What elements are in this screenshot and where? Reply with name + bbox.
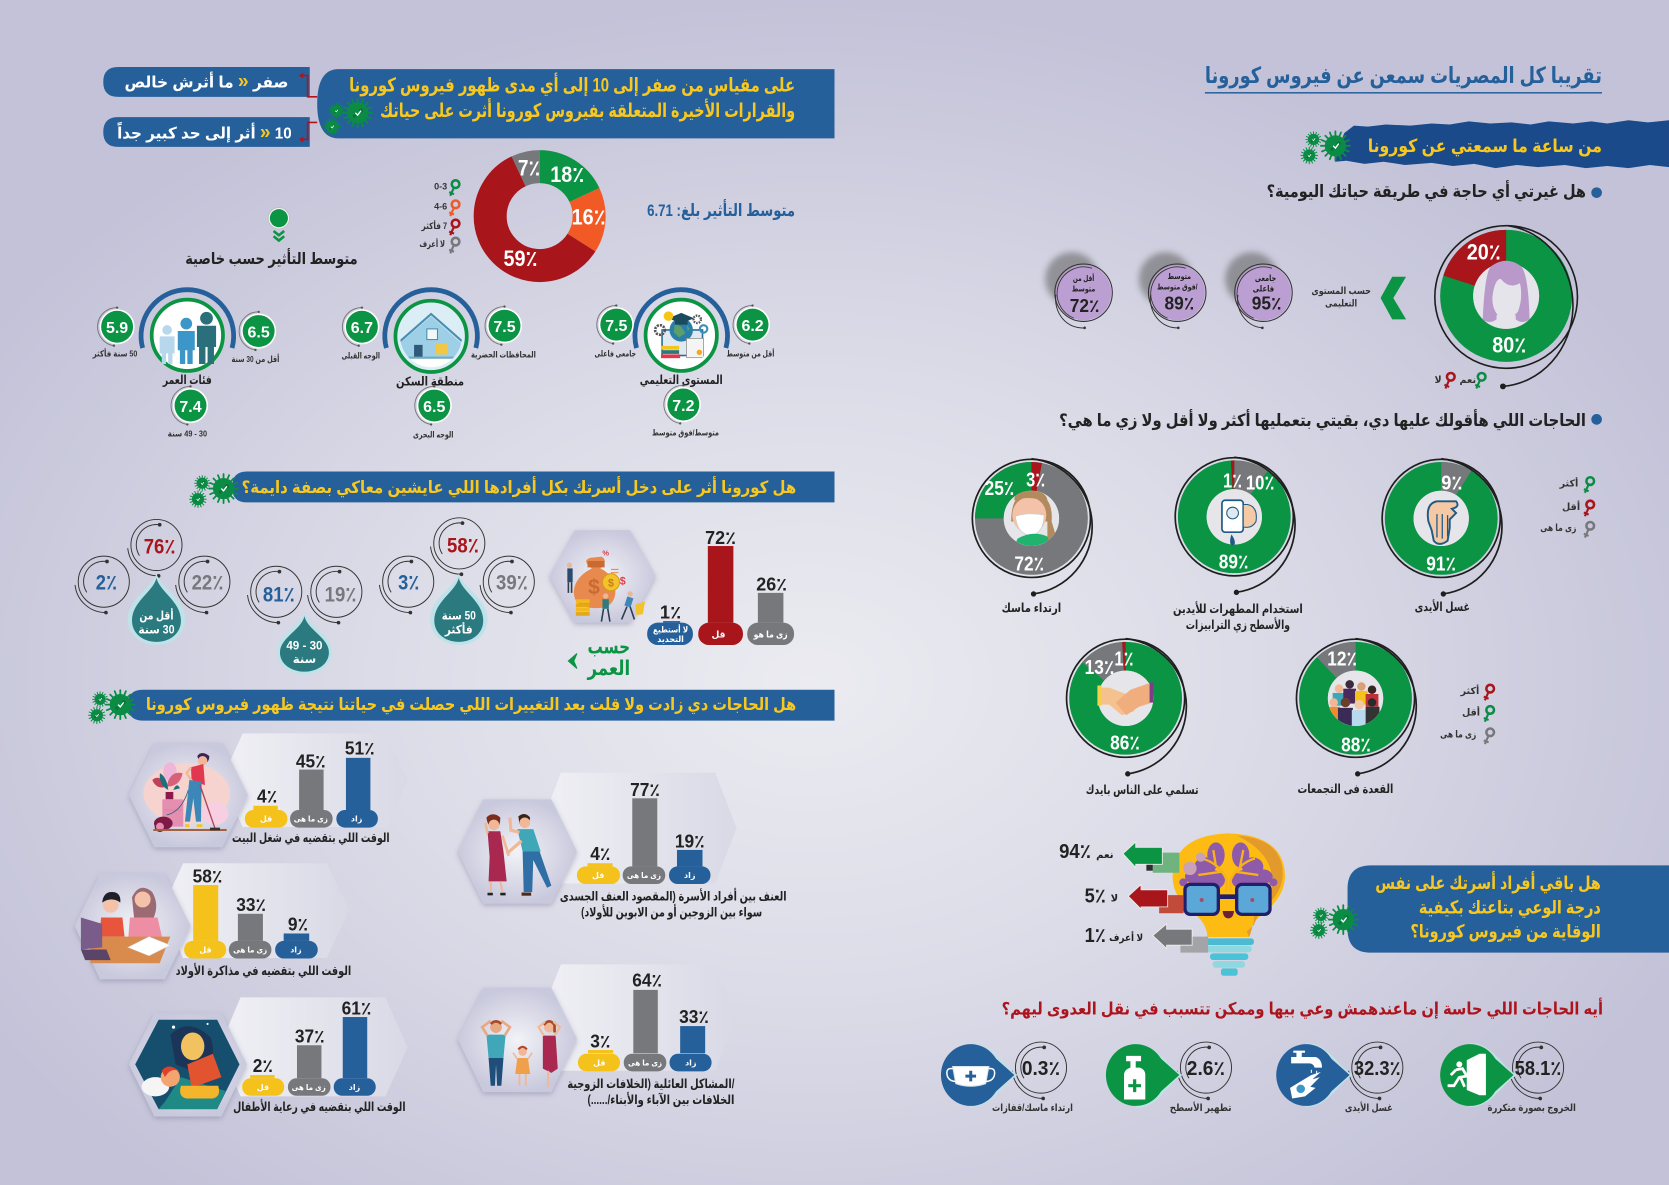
caption: سواء بين الزوجين أو من الابوين للأولاد): [581, 903, 762, 919]
value: over 50: 50 سنة فأكثر: [92, 348, 138, 360]
banner: family awareness: درجة الوعي بتاعتك بكيفية: [1419, 897, 1601, 918]
donut chart: changed daily life: [1435, 226, 1577, 389]
bars: زى ما هى: [628, 1058, 662, 1067]
bars: زى ما هى: [627, 871, 661, 880]
bar: decreased: [698, 528, 743, 645]
value: urban governorates: [471, 305, 536, 361]
value: urban governorates: 7.5: [493, 319, 516, 336]
arrow: don't know gray: [1153, 924, 1208, 953]
caption: /المشاكل العائلية (الخلافات الزوجية: [567, 1076, 735, 1091]
item: exit frequently: [1440, 1042, 1576, 1114]
icon: money bag hexagon: $: [620, 575, 626, 587]
bars: [577, 780, 710, 884]
circle: university: [1225, 252, 1292, 329]
stat: no 5: لا: [1111, 894, 1118, 905]
pill: zero: صفر « ما أثرش خالص: [125, 70, 288, 92]
donut: handshake: 1٪: [1114, 648, 1134, 670]
circle: below intermediate: أقل من: [1073, 273, 1094, 283]
label: wearing mask: ارتداء ماسك: [1002, 601, 1061, 615]
bars: [245, 739, 378, 828]
drop: under 30: أقل من: [139, 607, 174, 623]
banner: changes question: هل الحاجات دي زادت ولا قلت بعد التغييرات اللي حصلت في حياتنا نتيجة ظهور فيروس كورونا: [146, 695, 796, 715]
legend: impact score: لا أعرف: [419, 238, 445, 250]
drop: under 30: [128, 574, 185, 645]
caption: [567, 1076, 735, 1107]
legend: more less same top: أكثر: [1559, 476, 1578, 489]
value: over 50: 5.9: [106, 320, 128, 337]
donut: sanitizers: [1175, 457, 1295, 594]
legend: more less same top: [1540, 476, 1594, 538]
legend: more less same bottom: [1440, 684, 1494, 744]
banner: since you heard about corona: من ساعة ما سمعتي عن كورونا: [1368, 136, 1602, 157]
panel: income by age over 50: 3٪: [398, 571, 419, 595]
donut: hand washing: 9٪: [1441, 473, 1462, 495]
value: upper egypt: 6.7: [351, 320, 373, 337]
item: hand washing: [1276, 1042, 1403, 1114]
panel: education level: [594, 290, 774, 438]
value: 30-49: [168, 385, 208, 438]
panel: income by age under 30: [75, 519, 230, 645]
value: under 30: أقل من 30 سنة: [232, 353, 279, 365]
icon: woman silhouette: [1473, 261, 1539, 329]
banner: scale question: على مقياس من صفر إلى 10 إلى أي مدى ظهور فيروس كورونا: [349, 73, 795, 98]
stat: don't know 1: 1٪: [1085, 925, 1106, 947]
item: wearing mask and gloves: [941, 1042, 1073, 1114]
item: exit frequently: الخروج بصورة متكررة: [1488, 1103, 1576, 1114]
icon: three people: [152, 300, 223, 371]
circle: university: جامعى: [1255, 273, 1276, 283]
circle: below intermediate: متوسط: [1072, 285, 1095, 294]
item: surface sanitizing: تطهير الأسطح: [1170, 1101, 1232, 1114]
bars: 77٪: [630, 780, 660, 800]
icon: woman cleaning: [129, 743, 248, 847]
question 2: الحاجات اللي هأقولك عليها دي، بقيتي بتعمليها أكثر ولا أقل ولا زي ما هي؟: [1059, 409, 1586, 431]
legend: more less same bottom: أقل: [1462, 705, 1480, 718]
panel: income by age under 30: 22٪: [192, 571, 224, 595]
drop: under 30: 30 سنة: [138, 623, 175, 636]
bar: same: زى ما هو: [753, 630, 788, 641]
bars: 4٪: [257, 787, 277, 807]
bars: 9٪: [288, 914, 308, 934]
legend: yes no: نعم: [1460, 375, 1476, 386]
bars: زى ما هى: [233, 946, 268, 955]
donut chart: impact distribution: 59٪: [503, 246, 538, 271]
legend: more less same bottom: أكثر: [1460, 684, 1479, 697]
icon: woman with mask: [1004, 490, 1060, 546]
icon: house: [395, 301, 467, 372]
panel: age groups: [92, 290, 279, 438]
value: intermediate: 7.2: [672, 398, 695, 415]
value: upper egypt: الوجه القبلى: [342, 351, 380, 362]
drop: over 50: [430, 574, 488, 645]
stat: yes 94: [1059, 841, 1114, 863]
legend: impact score: 4-6: [434, 202, 447, 212]
bar: cannot determine: لا أستطيع: [653, 623, 688, 635]
panel: income by age over 50: [379, 518, 534, 645]
banner: changes question: [89, 690, 834, 724]
bars: 61٪: [342, 998, 371, 1018]
drop: over 50: 50 سنة: [442, 609, 476, 622]
panel: time on childcare: [129, 997, 408, 1117]
label: handshake: تسلمي على الناس بايدك: [1086, 783, 1199, 797]
value: urban governorates: المحافظات الحضرية: [471, 350, 536, 361]
arrow: chevron: [1381, 277, 1406, 319]
label: by age: العمر: [587, 658, 630, 680]
donut chart: changed daily life: 20٪: [1467, 240, 1501, 265]
arc: [385, 290, 477, 348]
question 1: هل غيرتي أي حاجة في طريقة حياتك اليومية؟: [1267, 180, 1586, 202]
bar: same: [747, 575, 794, 645]
circle: intermediate: [1139, 252, 1206, 329]
circle: intermediate: متوسط: [1168, 272, 1191, 281]
icon: light bulb with brain: [1173, 833, 1285, 976]
bar chart: income change: [647, 528, 794, 645]
donut: sanitizers: 89٪: [1219, 551, 1249, 573]
bars: زاد: [290, 946, 302, 955]
bars: زاد: [351, 815, 363, 824]
bars: زاد: [349, 1083, 361, 1092]
stat: yes 94: نعم: [1096, 850, 1114, 861]
legend: impact score: 0-3: [434, 181, 447, 191]
banner: family awareness: [1311, 865, 1669, 953]
bars: 4٪: [590, 844, 610, 864]
text: average impact: متوسط التأثير بلغ: 6.71: [647, 199, 795, 221]
drop: over 50: فأكثر: [444, 621, 473, 637]
arrow: yes green: [1123, 842, 1179, 873]
value: below intermediate: أقل من متوسط: [726, 348, 774, 360]
icon: stressed family: [458, 988, 577, 1092]
donut: sanitizers: 1٪: [1223, 470, 1242, 492]
bars: قل: [260, 815, 272, 824]
value: intermediate: متوسط/فوق متوسط: [652, 427, 719, 438]
circle: below intermediate: [1045, 252, 1112, 329]
donut: hand washing: 91٪: [1426, 554, 1456, 576]
bars: 19٪: [675, 831, 705, 851]
bars: 45٪: [296, 751, 326, 771]
panel: income by age under 30: 2٪: [96, 571, 117, 595]
legend: yes no: [1434, 373, 1485, 389]
value: below intermediate: [726, 304, 774, 360]
icon: washing hands: [1414, 491, 1469, 546]
icon: virus cluster: [324, 98, 372, 135]
value: 30-49: 30 - 49 سنة: [168, 428, 207, 438]
bars: قل: [199, 946, 212, 955]
label: by education level: التعليمى: [1325, 299, 1357, 310]
label: hand washing: غسل الأيدى: [1415, 599, 1470, 614]
donut chart: changed daily life: 80٪: [1492, 332, 1526, 357]
value: under 30: [232, 311, 279, 365]
donut: wearing mask: [972, 459, 1092, 596]
donut chart: impact distribution: [490, 156, 606, 271]
donut chart: impact distribution: 18٪: [550, 162, 584, 187]
bars: 2٪: [253, 1056, 273, 1076]
connector arrows: [300, 73, 317, 142]
bars: [184, 866, 318, 958]
value: over 50: [92, 306, 138, 360]
panel: residence area: [342, 290, 536, 440]
label: منطقة السكن: [396, 374, 464, 388]
bars: زى ما هى: [292, 1083, 326, 1092]
label: gatherings: القعدة فى التجمعات: [1298, 782, 1393, 796]
icon: green dot with chevrons: [268, 208, 290, 241]
bar: same: 26٪: [756, 575, 787, 595]
icon: money bag hexagon: $: [608, 577, 614, 589]
panel: family problems: [458, 964, 737, 1107]
donut: gatherings: 88٪: [1341, 734, 1371, 756]
bar: cannot determine: 1٪: [660, 602, 681, 622]
donut: handshake: 86٪: [1110, 732, 1140, 754]
donut: gatherings: [1296, 639, 1416, 776]
bars: 33٪: [679, 1007, 709, 1027]
banner: family awareness: الوقاية من فيروس كورونا؟: [1410, 922, 1601, 943]
bar: cannot determine: التحديد: [657, 634, 684, 644]
icon: money bag hexagon: %: [602, 549, 609, 558]
panel: income by age over 50: 58٪: [447, 533, 479, 557]
stat: don't know 1: لا أعرف: [1109, 931, 1143, 944]
value: university: 7.5: [605, 318, 628, 335]
item: surface sanitizing: 2.6٪: [1187, 1058, 1225, 1080]
value: university: جامعى فاعلى: [594, 349, 636, 359]
donut chart: impact distribution: 16٪: [572, 205, 606, 230]
bars: قل: [592, 871, 604, 880]
pill: zero: [103, 67, 310, 97]
panel: income by age over 50: 39٪: [496, 571, 528, 595]
item: exit frequently: 58.1٪: [1515, 1058, 1561, 1080]
icon: mother and son studying: [75, 874, 191, 979]
icon: wall sanitizer: [1207, 489, 1262, 546]
arc: [141, 290, 234, 348]
icon: crowd: [1327, 671, 1383, 729]
label: sanitizers: والأسطح زي الترابيزات: [1186, 617, 1290, 632]
icon: mother and sleeping child: [129, 1013, 247, 1117]
legend: more less same top: زى ما هى: [1540, 523, 1576, 534]
bars: [242, 998, 376, 1096]
panel: income by age 30-49: 19٪: [325, 582, 357, 606]
bar: decreased: قل: [711, 630, 726, 640]
bars: زاد: [685, 1058, 697, 1067]
bars: قل: [593, 1058, 605, 1067]
banner: since you heard about corona: [1301, 120, 1669, 168]
banner: income question: هل كورونا أثر على دخل أسرتك بكل أفرادها اللي عايشين معاكي بصفة دايمة؟: [242, 476, 796, 498]
item: hand washing: غسل الأيدى: [1345, 1101, 1393, 1114]
value: lower egypt: [413, 385, 454, 440]
panel: impact scale heading: [103, 67, 835, 147]
panel: time studying with children: [75, 863, 351, 979]
bars: زاد: [684, 871, 696, 880]
pill: ten: 10 « أثر إلى حد كبير جداً: [117, 121, 292, 143]
bars: 58٪: [193, 866, 222, 886]
circle: university: فاعلى: [1253, 284, 1274, 294]
panel: family violence: [458, 773, 787, 919]
caption: الوقت اللي بتقضيه في رعاية الأطفال: [233, 1099, 406, 1114]
stat: no 5: 5٪: [1085, 886, 1106, 908]
drop: 30-49: 30 - 49: [286, 639, 323, 652]
circle: intermediate: /فوق متوسط: [1157, 283, 1198, 292]
item: surface sanitizing: [1106, 1042, 1232, 1114]
item: wearing mask and gloves: ارتداء ماسك/قفازات: [992, 1103, 1073, 1114]
donut: sanitizers: 10٪: [1246, 473, 1275, 495]
icon: education: [646, 300, 717, 371]
icon: couple arguing: [458, 799, 577, 904]
legend: impact score: [419, 180, 459, 253]
value: upper egypt: [342, 306, 380, 362]
bars: 37٪: [295, 1027, 325, 1047]
bar: decreased: 72٪: [705, 528, 736, 548]
bars: 3٪: [590, 1031, 610, 1051]
stat: yes 94: 94٪: [1059, 841, 1091, 863]
bars: [578, 971, 712, 1071]
donut: wearing mask: 3٪: [1026, 469, 1045, 491]
legend: more less same top: أقل: [1562, 500, 1580, 513]
icon: handshake: [1097, 671, 1153, 726]
value: university: [594, 304, 636, 359]
outer ring: [1435, 226, 1577, 389]
caption: [560, 887, 787, 919]
label: المستوى التعليمي: [640, 373, 723, 387]
bars: قل: [257, 1083, 269, 1092]
value: 30-49: 7.4: [179, 399, 202, 416]
item: hand washing: 32.3٪: [1354, 1058, 1401, 1080]
bars: زى ما هى: [294, 815, 328, 824]
arrow: no red: [1128, 885, 1184, 913]
donut chart: impact distribution: 7٪: [518, 156, 540, 181]
value: under 30: 6.5: [248, 324, 270, 341]
value: lower egypt: 6.5: [423, 399, 445, 416]
panel: income by age 30-49: 81٪: [263, 582, 295, 606]
icon: money bag hexagon: [549, 530, 656, 623]
value: below intermediate: 6.2: [741, 318, 764, 335]
value: intermediate: [652, 384, 719, 438]
bars: 33٪: [236, 895, 266, 915]
drop: 30-49: سنة: [293, 653, 316, 666]
donut: handshake: [1067, 639, 1186, 776]
panel: income by age 30-49: [247, 566, 362, 675]
label: sanitizers: [1173, 601, 1303, 632]
icon: money bag hexagon: $: [588, 575, 600, 599]
bars: 51٪: [345, 739, 375, 759]
value: lower egypt: الوجه البحرى: [413, 429, 454, 440]
banner: family awareness: هل باقي أفراد أسرتك على نفس: [1375, 871, 1601, 894]
label: فئات العمر: [162, 373, 212, 387]
label: by age: حسب: [588, 637, 630, 659]
pill: ten: [103, 117, 310, 147]
bars: 64٪: [632, 971, 662, 991]
donut: gatherings: 12٪: [1327, 648, 1357, 670]
label: by education level: [1311, 286, 1371, 310]
legend: impact score: 7 فأكثر: [421, 220, 447, 232]
banner: scale question: والقرارات الأخيرة المتعلقة بفيروس كورونا أثرت على حياتك: [380, 98, 795, 122]
bar: cannot determine: [647, 602, 693, 645]
donut: wearing mask: 72٪: [1014, 554, 1044, 576]
stat: don't know 1: [1085, 925, 1143, 947]
legend: more less same bottom: زى ما هى: [1440, 730, 1476, 741]
drop: 30-49: [277, 612, 332, 675]
label: by education level: حسب المستوى: [1311, 286, 1371, 297]
heading: average by characteristic: متوسط التأثير حسب خاصية: [185, 248, 358, 268]
legend: yes no: لا: [1434, 375, 1442, 386]
donut: hand washing: [1382, 459, 1502, 596]
donut: wearing mask: 25٪: [985, 478, 1014, 500]
item: wearing mask and gloves: 0.3٪: [1022, 1058, 1060, 1080]
label: by age: [568, 637, 630, 680]
banner: scale question: [317, 69, 835, 138]
banner: income question: [190, 472, 834, 508]
circle: below intermediate: 72٪: [1070, 296, 1100, 316]
donut: handshake: 13٪: [1085, 657, 1114, 679]
arc: [635, 290, 728, 348]
panel: time on housework: [129, 733, 408, 847]
caption: الوقت اللي بتقضيه في شغل البيت: [232, 830, 390, 845]
caption: الخلافات بين الآباء والأبناء/......): [588, 1092, 734, 1107]
caption: العنف بين أفراد الأسرة (المقصود العنف الجسدى: [560, 887, 787, 903]
label: sanitizers: استخدام المطهرات للأيدين: [1173, 601, 1303, 617]
panel: income by age under 30: 76٪: [144, 534, 176, 558]
circle: university: 95٪: [1252, 294, 1282, 314]
caption: الوقت اللي بتقضيه في مذاكرة الأولاد: [176, 963, 351, 978]
circle: intermediate: 89٪: [1164, 294, 1194, 314]
